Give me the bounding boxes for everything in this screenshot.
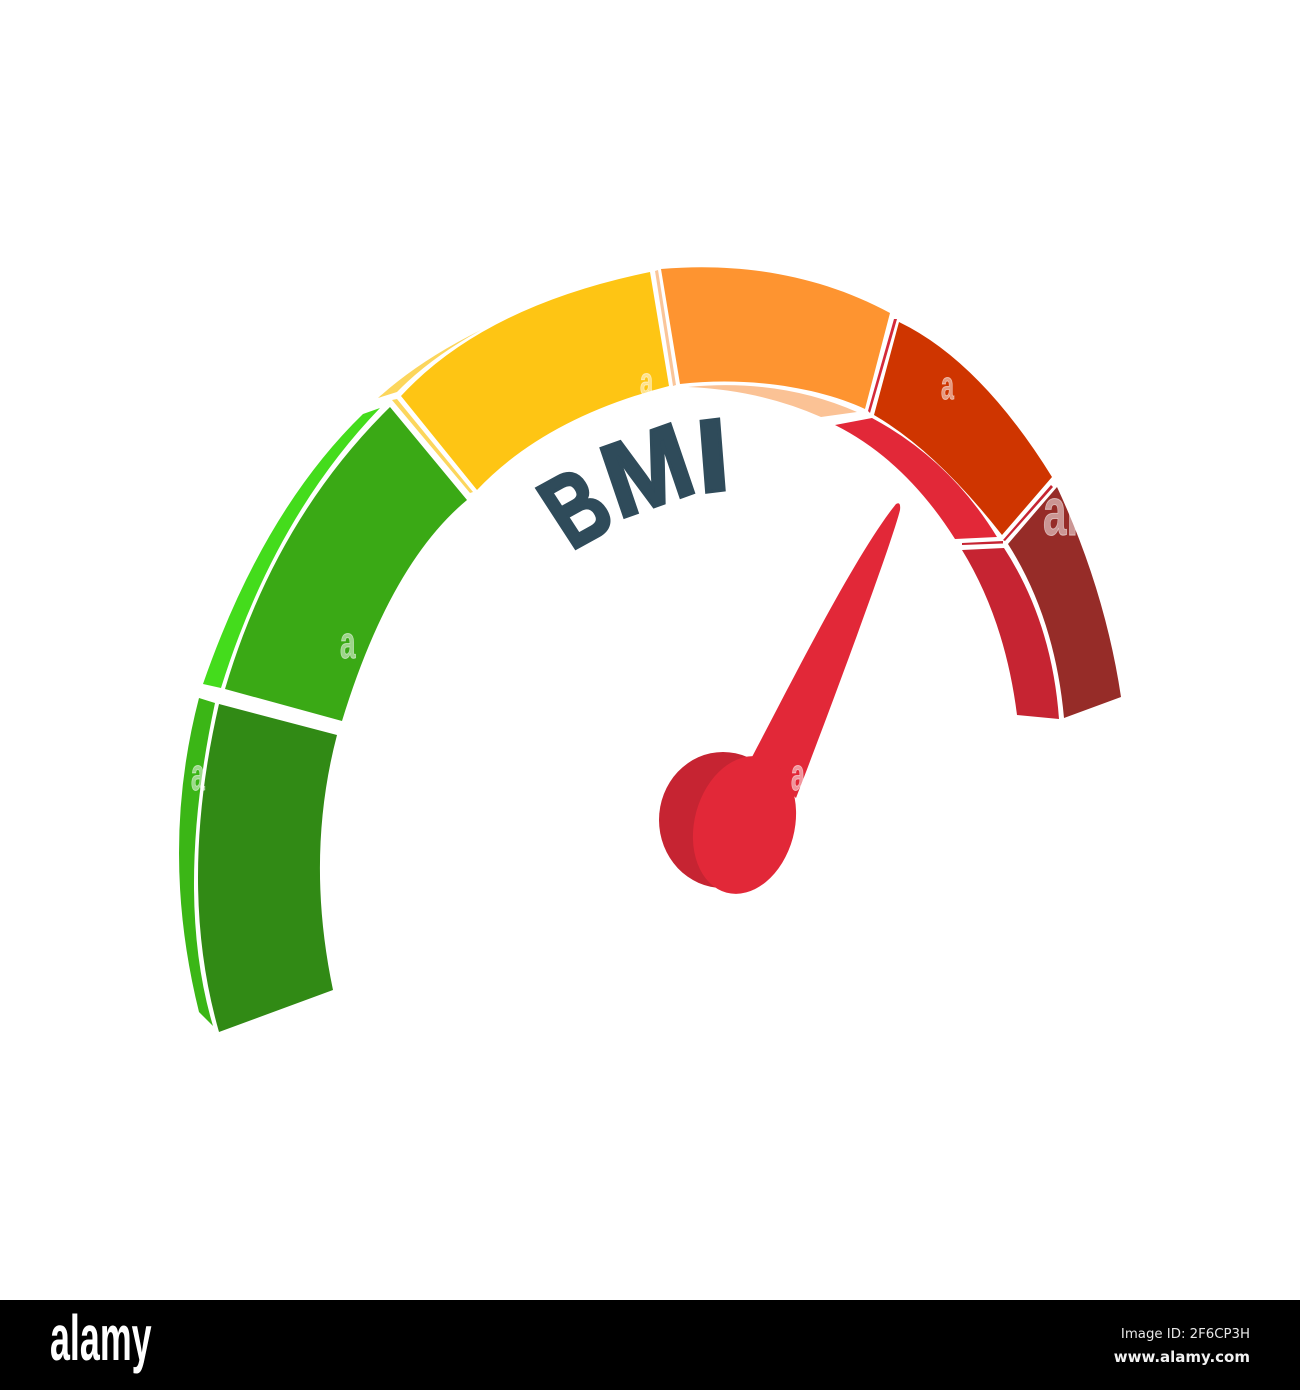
gauge segment: yellow (378, 272, 669, 493)
gauge segment: orange (655, 267, 890, 417)
watermark glyphs: a (640, 359, 653, 402)
watermark glyphs: a (791, 749, 805, 800)
gauge label: BMI: I (692, 396, 734, 515)
footer bar (0, 1300, 1300, 1390)
gauge segment: red-orange (835, 319, 1052, 539)
gauge segment: green (203, 407, 467, 721)
gauge segment: dark red (962, 485, 1121, 719)
footer logo: alamy: alamy (50, 1302, 152, 1374)
gauge segment: dark green (179, 698, 337, 1032)
watermark glyphs (191, 359, 1078, 800)
needle (659, 503, 900, 906)
watermark glyphs: al (1043, 474, 1078, 549)
footer website: www.alamy.com (1114, 1348, 1250, 1366)
gauge label: BMI (520, 396, 734, 570)
watermark glyphs: a (340, 617, 356, 668)
gauge label: BMI: B (520, 446, 632, 570)
footer image id: Image ID: 2F6CP3H (1121, 1327, 1250, 1342)
watermark glyphs: a (191, 749, 205, 800)
gauge label: BMI: M (588, 401, 707, 541)
watermark glyphs: a (941, 362, 954, 408)
